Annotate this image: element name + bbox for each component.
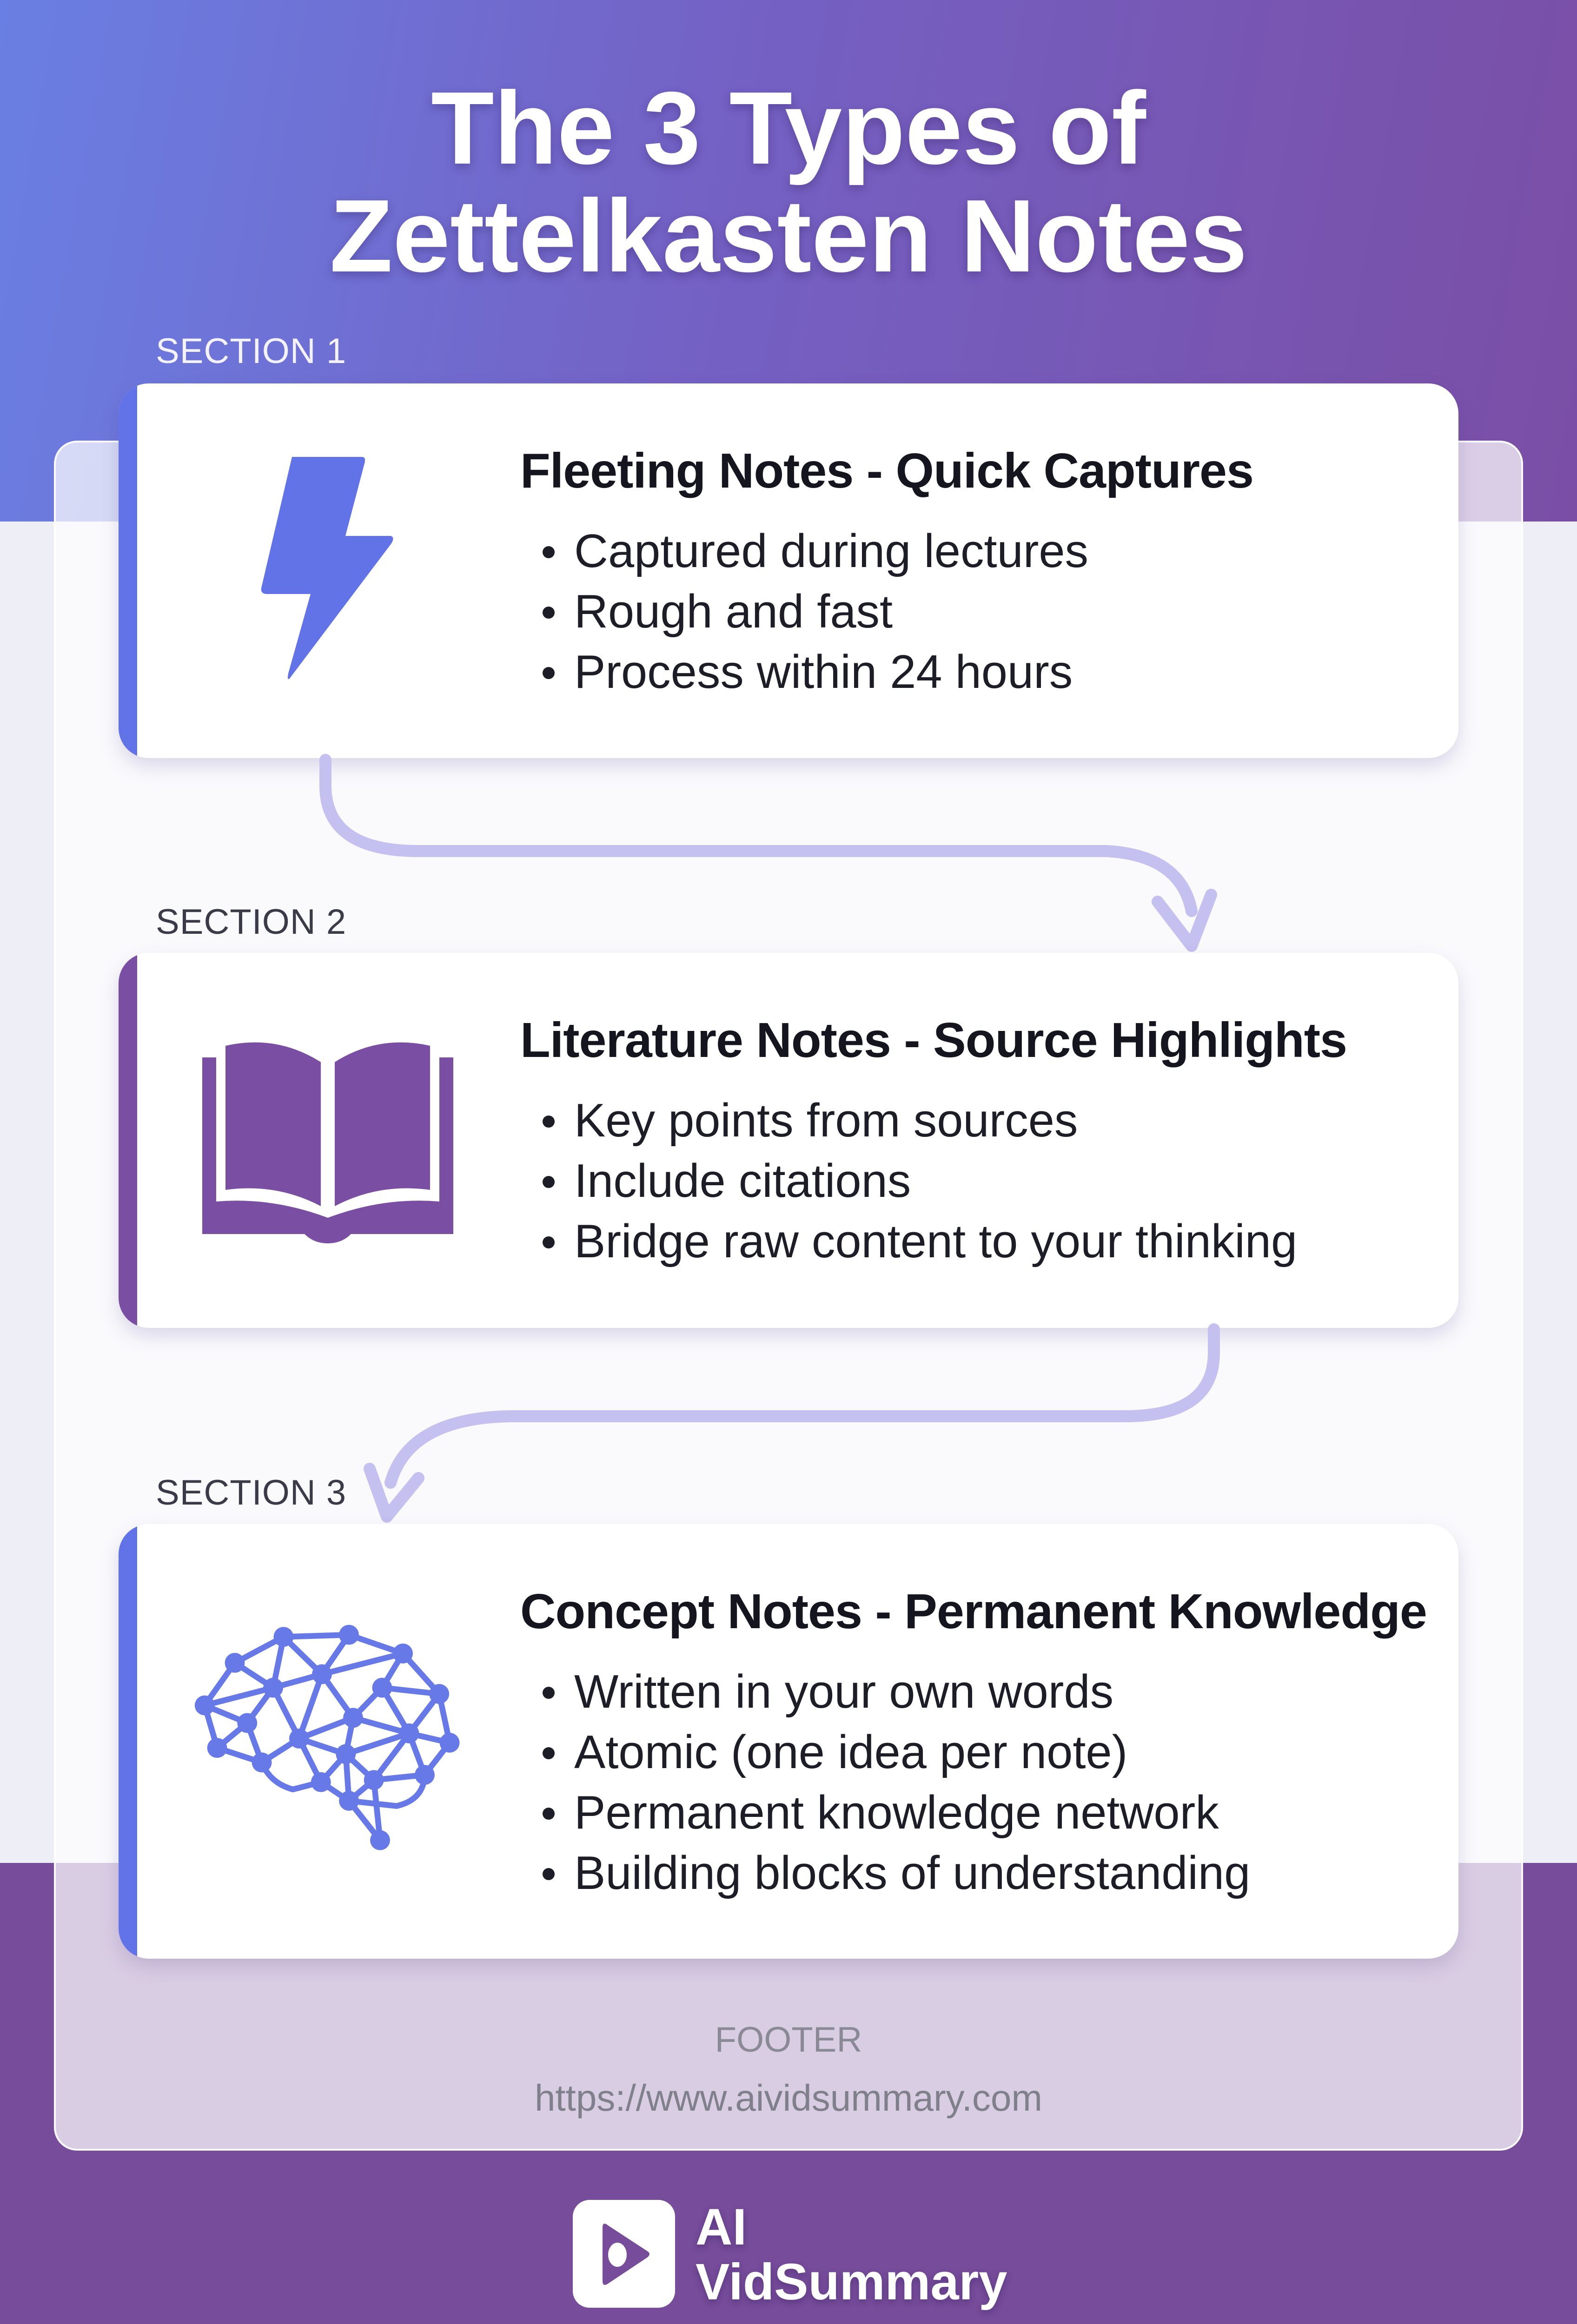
card 2 bullets — [520, 1090, 1297, 1272]
title: The 3 Types of — [431, 71, 1146, 186]
logo icon — [573, 2200, 675, 2308]
logo text: VidSummary — [696, 2253, 1007, 2311]
card 2 bullets: Key points from sources — [574, 1095, 1078, 1147]
footer label: FOOTER — [715, 2020, 862, 2060]
section 2 label: SECTION 2 — [156, 902, 346, 942]
card 1 title: Fleeting Notes - Quick Captures — [520, 443, 1253, 498]
card 3 bullets: Atomic (one idea per note) — [574, 1726, 1127, 1778]
card 3: concept notes — [119, 1524, 1458, 1959]
card 2 bullets: Bridge raw content to your thinking — [574, 1215, 1297, 1268]
card 1 bullets: Process within 24 hours — [574, 646, 1073, 698]
card 3 bullets — [520, 1662, 1250, 1903]
title — [0, 74, 1577, 290]
logo text — [696, 2200, 1007, 2310]
section 1 label: SECTION 1 — [156, 331, 346, 371]
logo — [573, 2200, 1019, 2311]
card 2: literature notes — [119, 953, 1458, 1328]
card 1 bullets: Captured during lectures — [574, 525, 1088, 577]
icon: lightning — [259, 457, 394, 682]
card 2 bullets: Include citations — [574, 1155, 911, 1207]
background bottom purple — [0, 1863, 1577, 2324]
card 1: fleeting notes — [119, 383, 1458, 758]
footer url: https://www.aividsummary.com — [535, 2077, 1042, 2119]
icon: book — [202, 1039, 453, 1243]
card 2 title: Literature Notes - Source Highlights — [520, 1013, 1347, 1068]
main translucent panel — [54, 441, 1523, 2151]
card 3 bullets: Written in your own words — [574, 1666, 1113, 1718]
card 3 title: Concept Notes - Permanent Knowledge — [520, 1584, 1427, 1639]
icon: brain network — [177, 1576, 502, 1901]
title: Zettelkasten Notes — [330, 178, 1247, 294]
section 3 label: SECTION 3 — [156, 1473, 346, 1512]
logo text: AI — [696, 2199, 747, 2256]
background top gradient — [0, 0, 1577, 522]
card 1 bullets: Rough and fast — [574, 586, 893, 638]
card 3 bullets: Permanent knowledge network — [574, 1787, 1219, 1839]
card 3 bullets: Building blocks of understanding — [574, 1847, 1250, 1899]
card 1 bullets — [520, 521, 1088, 702]
